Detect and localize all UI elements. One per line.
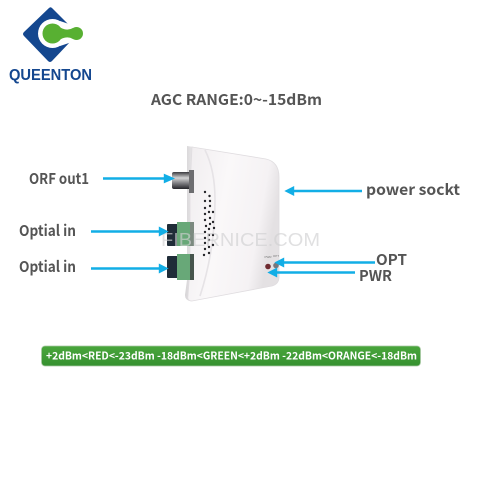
- device: side wall: [185, 146, 199, 301]
- logo icon: white C and green blobs: [38, 19, 86, 48]
- device: LED indicators: OPT: [273, 254, 279, 258]
- device: coax connector: [172, 170, 194, 193]
- label: power sockt: power sockt: [366, 179, 461, 200]
- legend bar: signal ranges: +2dBm<RED<-23dBm -18dBm<GREEN<+2dBm -22dBm<ORANGE<-18dBm: [46, 348, 417, 364]
- label: Optial in upper: Optial in: [19, 220, 76, 241]
- device: optical port 1: [167, 222, 194, 246]
- device: optical port 2: [167, 254, 194, 280]
- device: front curved panel edge: [200, 150, 215, 296]
- arrow: OPT: [277, 260, 375, 266]
- label: Optial in lower: Optial in: [19, 256, 76, 277]
- arrow: Optial in lower: [91, 266, 166, 272]
- logo wordmark: QUEENTON: [9, 67, 92, 84]
- label: OPT: OPT: [376, 249, 407, 270]
- arrow: Optial in upper: [91, 228, 166, 234]
- device: LED indicators: PWR: [264, 255, 272, 259]
- label: ORF out1: ORF out1: [29, 168, 89, 189]
- heading: AGC range: AGC RANGE:0~-15dBm: [150, 89, 322, 110]
- watermark: FIBERNICE.COM: [161, 230, 320, 250]
- arrow: ORF out1: [103, 176, 172, 182]
- arrow: power sockt: [287, 188, 362, 194]
- device: white housing: [188, 147, 279, 301]
- device illustration: [167, 146, 279, 301]
- logo: Queenton: [9, 7, 92, 84]
- device: LED indicators: [264, 254, 279, 269]
- label: PWR: PWR: [359, 265, 392, 286]
- arrow: PWR: [270, 270, 355, 276]
- logo icon: blue diamond: [23, 7, 70, 62]
- device: vent holes: [203, 191, 215, 256]
